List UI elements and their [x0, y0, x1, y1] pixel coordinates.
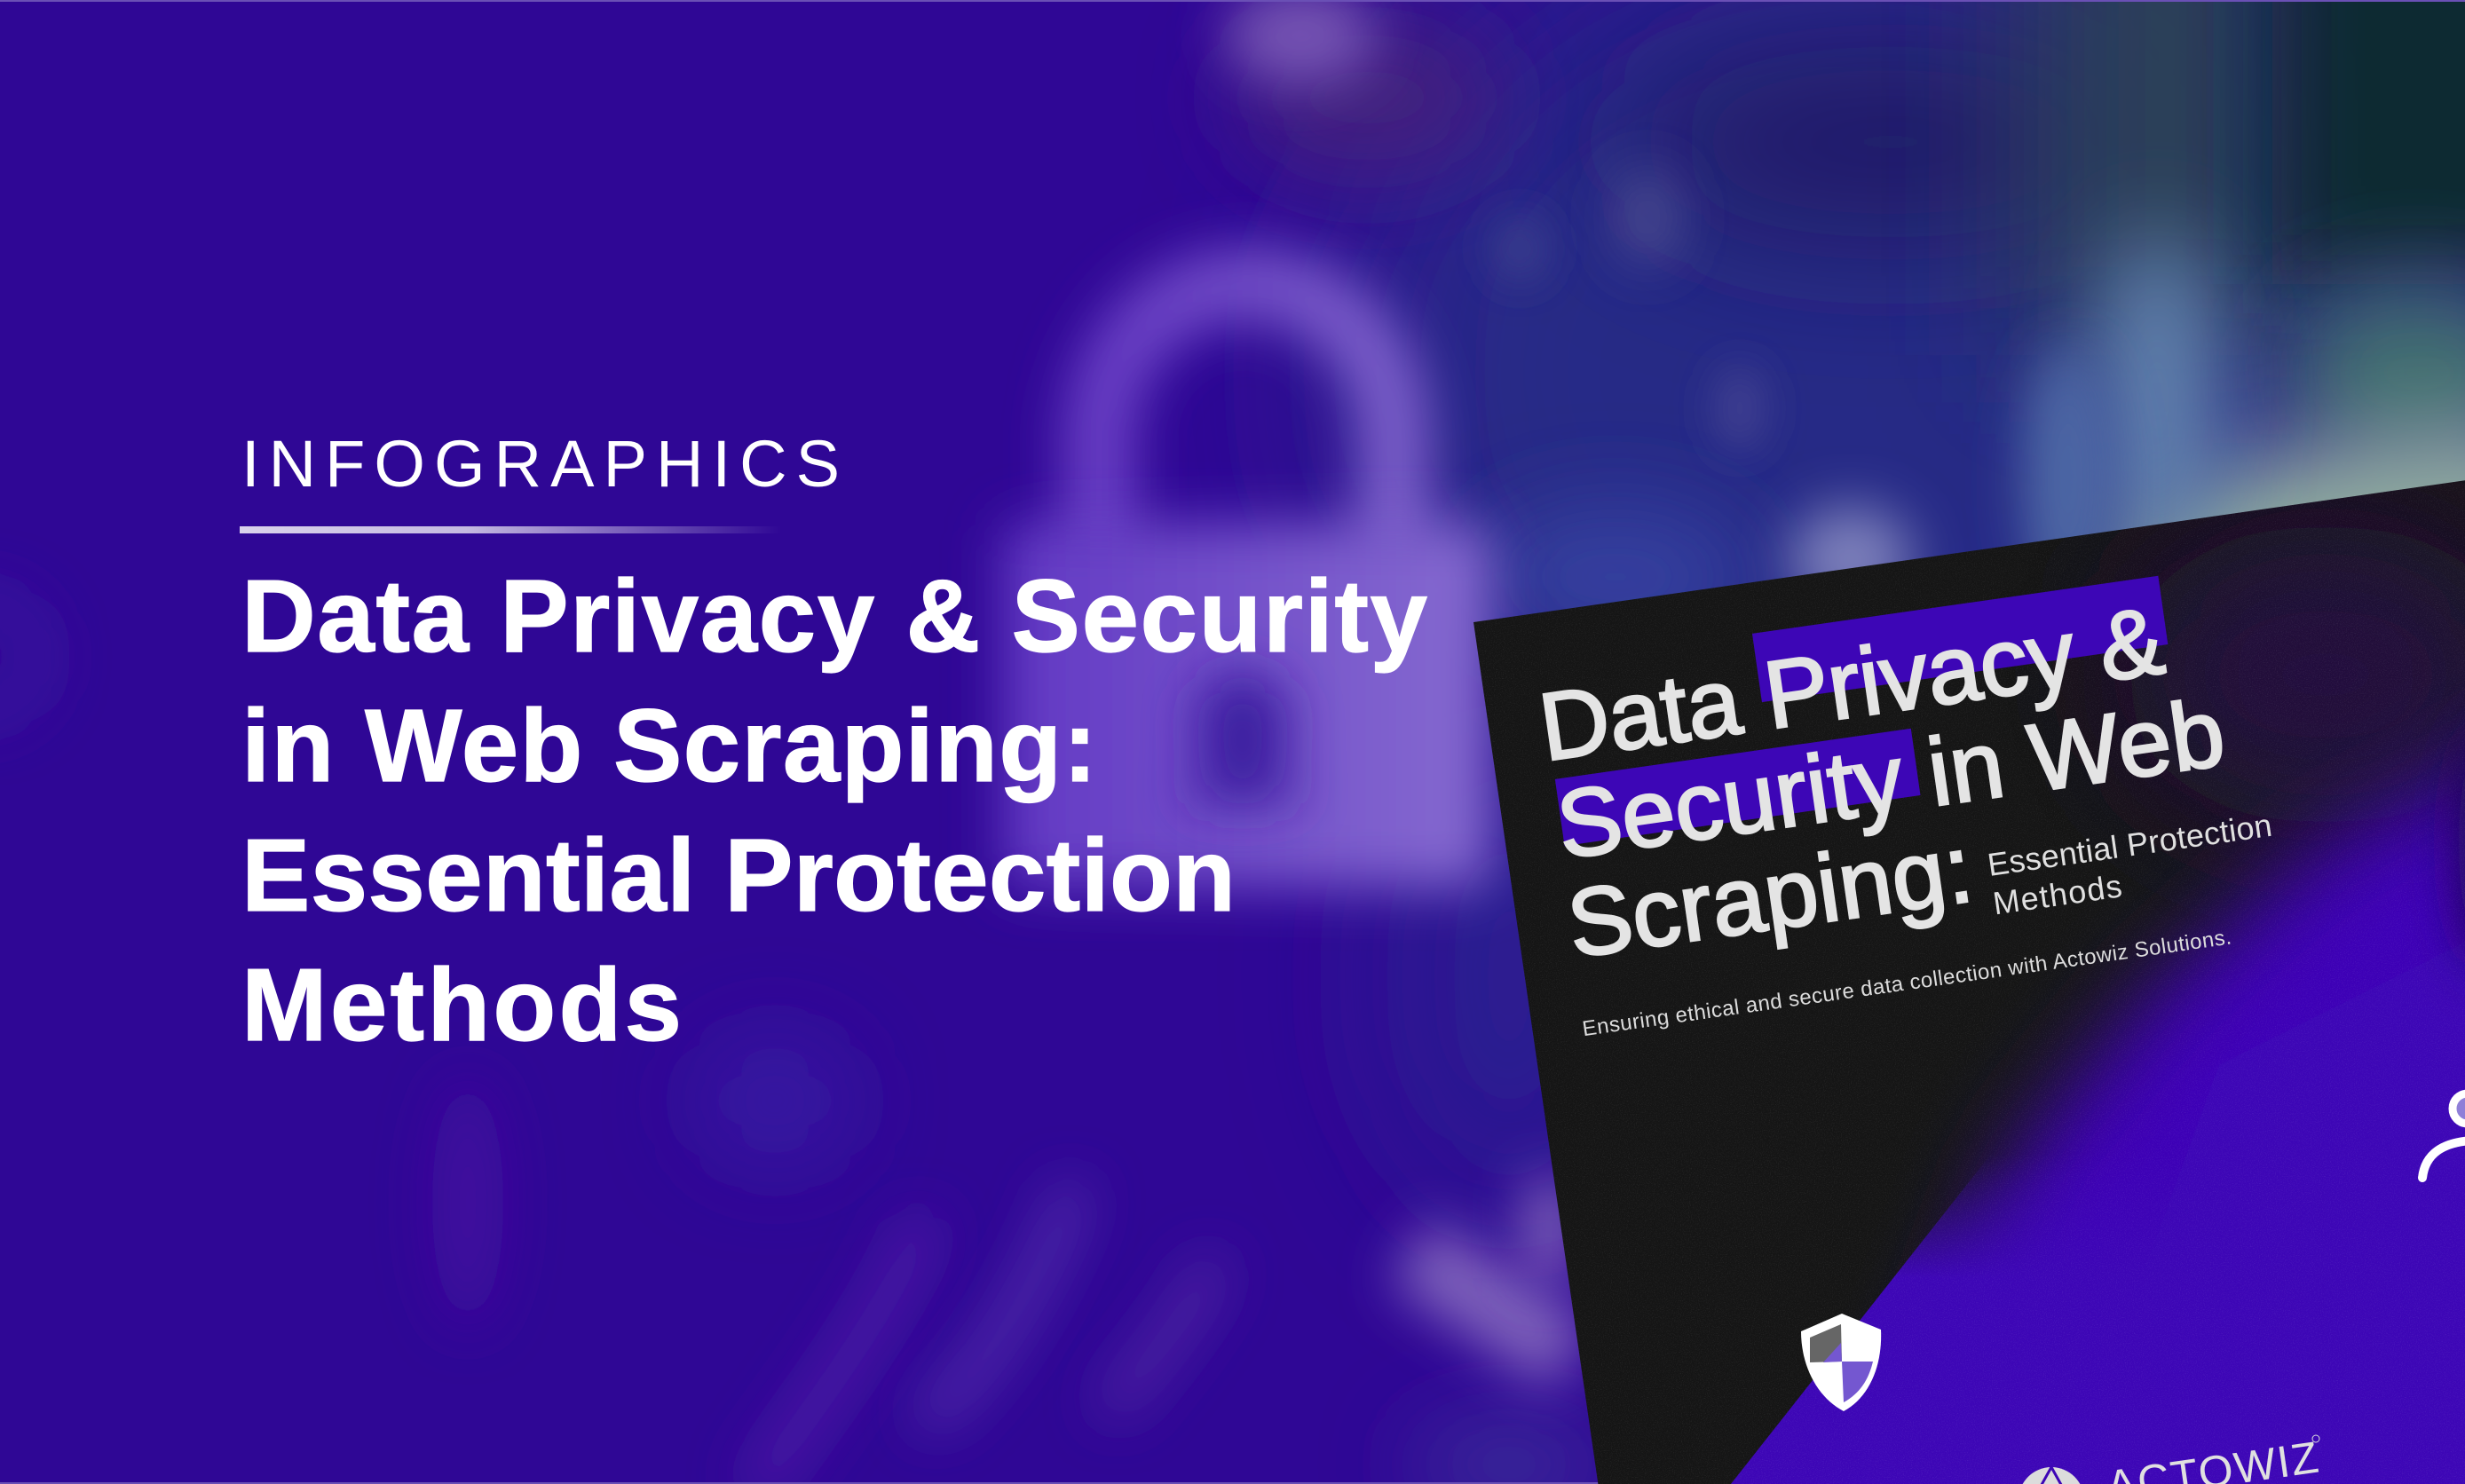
- main heading: Methods: [241, 947, 682, 1062]
- title highlight: Privacy &: [1752, 576, 2168, 702]
- background: blurred padlock: [1003, 284, 1491, 888]
- cover title: [1543, 610, 2223, 956]
- panel: tilted report cover: [1420, 444, 2465, 1484]
- cover subtitle: [1988, 818, 2271, 914]
- divider rule: [240, 526, 781, 533]
- title highlight: Security: [1555, 729, 1920, 846]
- eyebrow label: INFOGRAPHICS: INFOGRAPHICS: [241, 427, 840, 501]
- cover subtitle: Methods: [1991, 867, 2124, 921]
- icon: shield: [1801, 1314, 1881, 1411]
- cover subtitle: Essential Protection: [1985, 807, 2274, 883]
- main heading: Essential Protection: [241, 817, 1236, 933]
- main heading: Data Privacy & Security: [241, 558, 1427, 674]
- main heading: in Web Scraping:: [241, 688, 1097, 803]
- cover tagline: Ensuring ethical and secure data collection with Actowiz Solutions.: [1581, 925, 2232, 1041]
- icon: person outline: [2422, 1093, 2465, 1178]
- cover title: Security in Web: [1551, 678, 2231, 879]
- cover title: Scraping:: [1561, 814, 1979, 978]
- cover text: [1530, 565, 2288, 1041]
- cover title: Data Privacy &: [1533, 586, 2170, 781]
- main heading: [241, 558, 1427, 1062]
